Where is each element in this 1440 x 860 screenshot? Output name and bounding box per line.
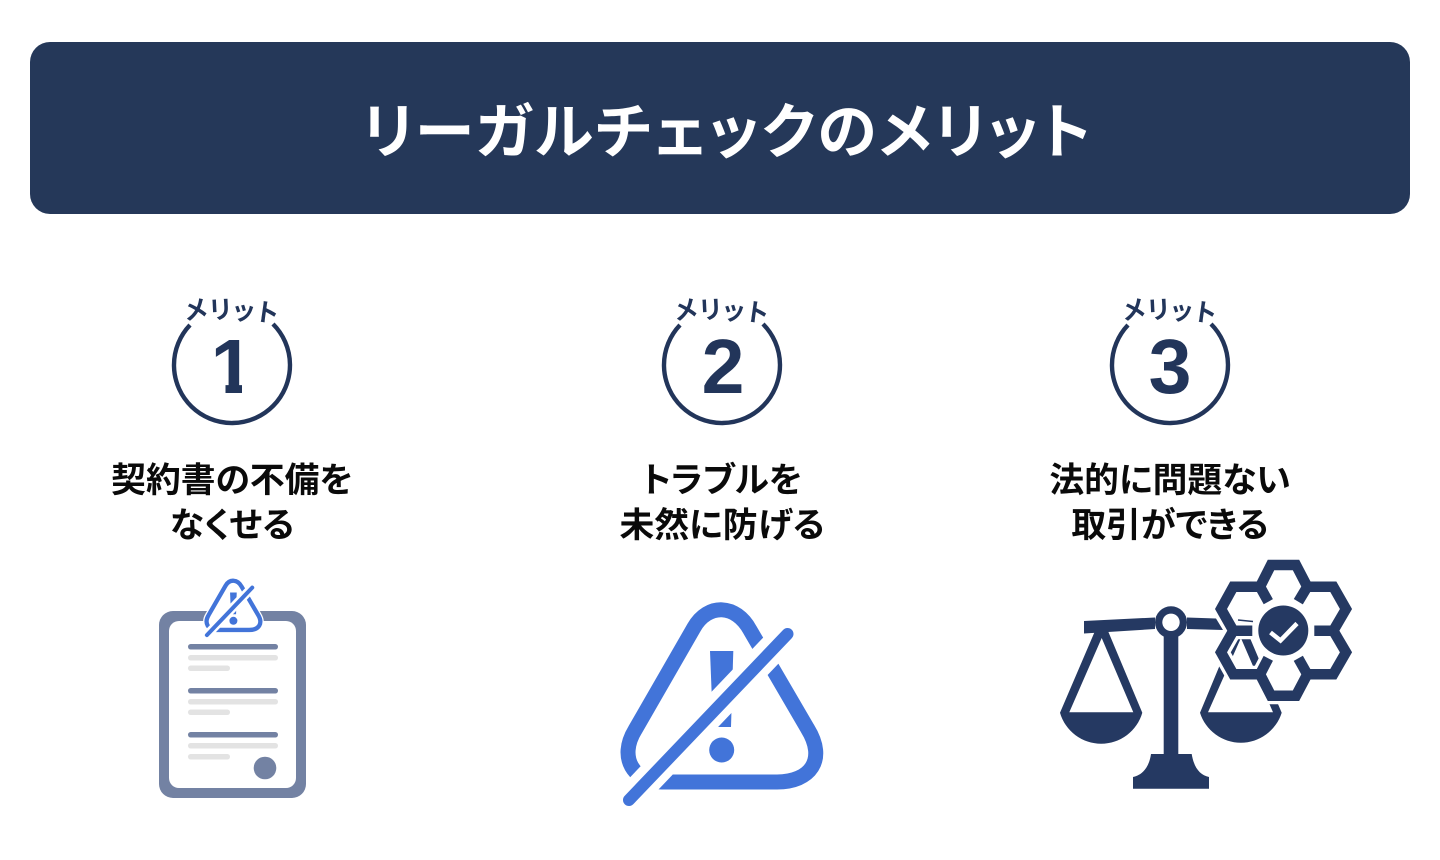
seal [254,757,276,779]
icon: crossed warning triangle [620,602,824,806]
icon: scales of justice with hexagon network [1060,560,1352,789]
badge: merit 2 [662,289,782,426]
heading: merit 3: 法的に問題ない [1049,453,1291,503]
badge: merit 3: 3 [1149,324,1191,410]
badge: merit 2: 2 [702,324,744,410]
document text lines [188,644,278,760]
badge: merit 1: 1 [211,324,253,410]
heading: merit 3: 取引ができる [1071,498,1269,548]
hexagon network [1221,565,1346,696]
heading: merit 2: 未然に防げる [619,498,825,548]
heading: merit 2 [619,453,825,548]
badge: merit 3 [1110,289,1230,426]
icon: contract clipboard with warning [159,578,306,798]
title banner: リーガルチェックのメリット [362,84,1093,171]
check badge [1258,606,1308,656]
clipboard body [159,611,306,798]
badge: merit 1: メリット [182,289,281,331]
badge: merit 1 [172,289,292,426]
heading: merit 1: なくせる [170,498,294,548]
beam fragment seen through hexagon [1238,620,1253,622]
heading: merit 3 [1049,453,1291,548]
badge: merit 2: メリット [672,289,771,331]
heading: merit 2: トラブルを [642,453,802,503]
badge: merit 3: メリット [1120,289,1219,331]
heading: merit 1: 契約書の不備を [111,453,353,503]
small crossed warning triangle [204,581,260,638]
heading: merit 1 [111,453,353,548]
scales [1060,606,1282,789]
white halo behind hexagons [1221,565,1346,696]
title banner [30,42,1410,214]
